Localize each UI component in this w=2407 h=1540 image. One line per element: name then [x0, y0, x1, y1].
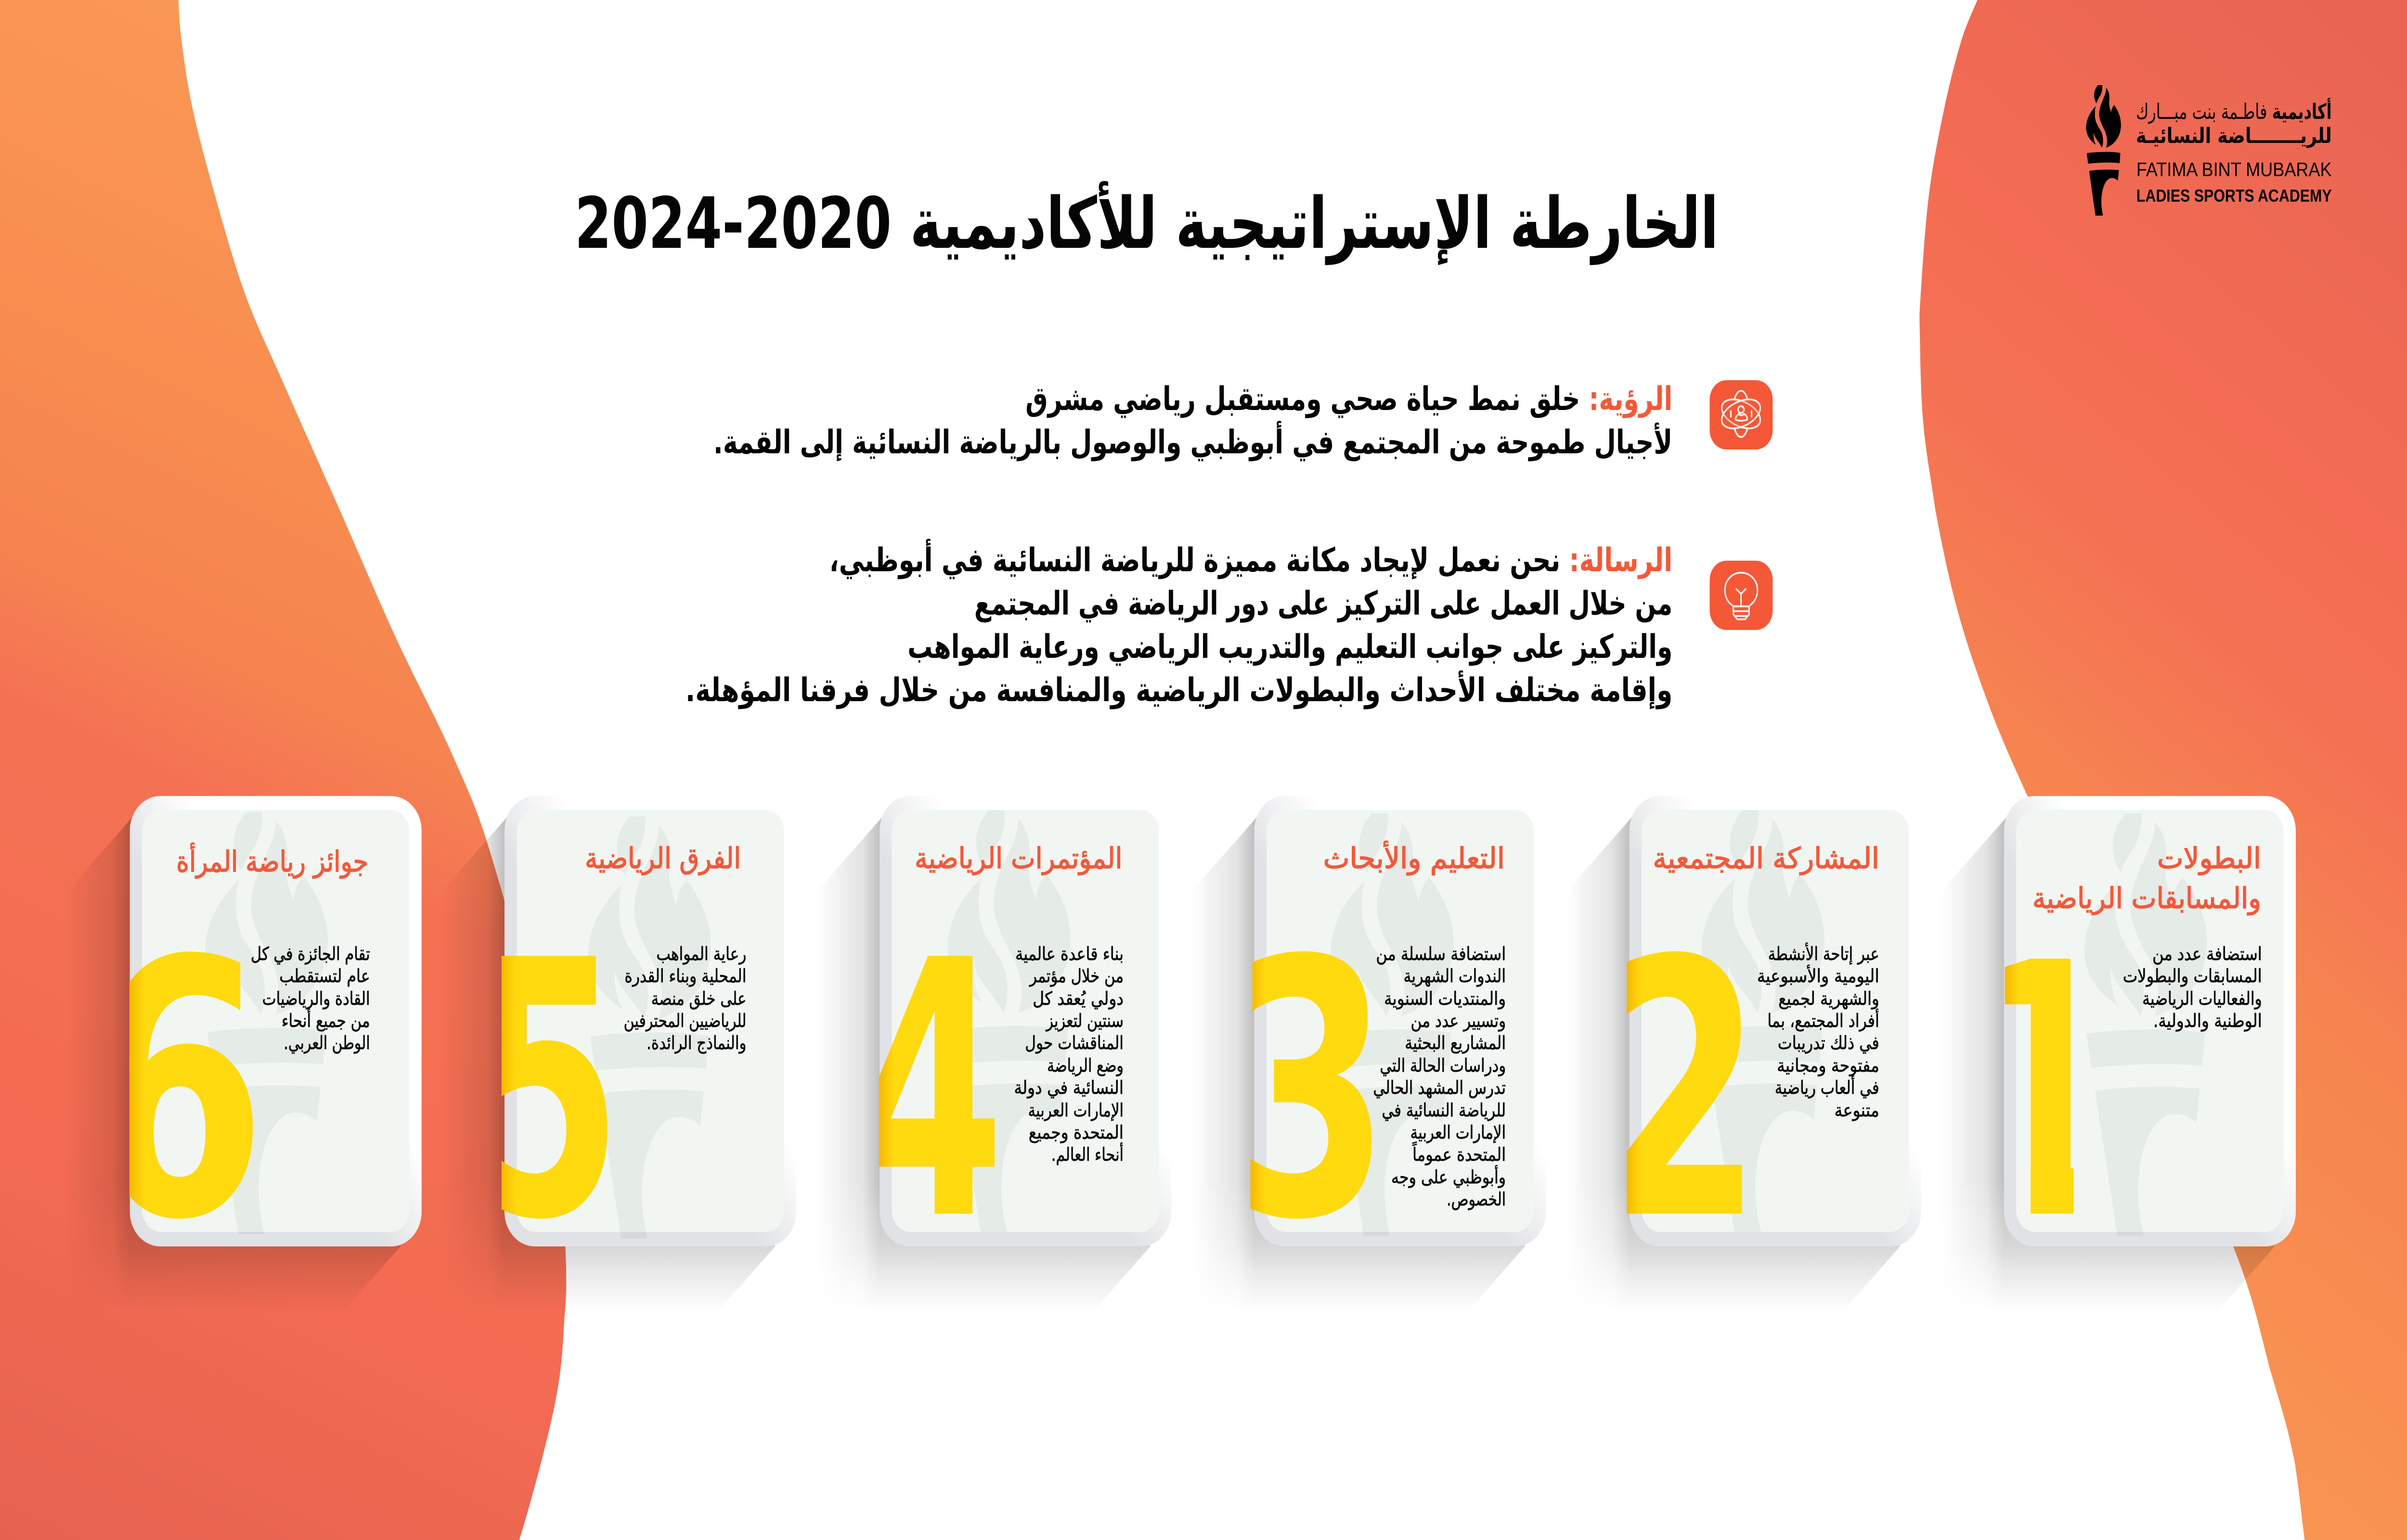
card 3 number: 3	[1229, 886, 1390, 1297]
card 5 body: رعاية المواهب	[656, 944, 746, 965]
card 1 body: استضافة عدد من	[2152, 944, 2262, 965]
card 4 plate	[880, 796, 1171, 1246]
card 4 body: وضع الرياضة	[1047, 1055, 1124, 1077]
mission line 1: الرسالة: نحن نعمل لإيجاد مكانة مميزة للرياضة النسائية في أبوظبي،	[829, 539, 1672, 579]
background shape: left orange wave	[0, 0, 566, 1540]
mission text block	[686, 539, 1672, 709]
card 5 body: على خلق منصة	[651, 988, 746, 1010]
card 5 body: للرياضيين المحترفين	[624, 1011, 746, 1032]
card 4 body: سنتين لتعزيز	[1046, 1011, 1124, 1032]
card 6 body: عام لتستقطب	[279, 966, 370, 987]
card 1: tournaments and competitions	[1941, 796, 2296, 1311]
card 4 body: المناقشات حول	[1025, 1033, 1124, 1054]
card 2 body: متنوعة	[1835, 1100, 1879, 1121]
card 5 body: والنماذج الرائدة.	[647, 1033, 746, 1054]
card 4 body: الإمارات العربية	[1028, 1100, 1124, 1121]
card 6 number: 6	[85, 886, 267, 1297]
vision line 2: لأجيال طموحة من المجتمع في أبوظبي والوصول بالرياضة النسائية إلى القمة.	[713, 421, 1672, 462]
mission line 2: من خلال العمل على التركيز على دور الرياضة في المجتمع	[974, 585, 1672, 623]
card 3 body: والمنتديات السنوية	[1384, 988, 1506, 1010]
card 3 body: للرياضة النسائية في	[1382, 1100, 1506, 1121]
card 1 body: المسابقات والبطولات	[2123, 966, 2262, 987]
card 3 body: المشاريع البحثية	[1405, 1033, 1506, 1054]
card 5 body: المحلية وبناء القدرة	[624, 966, 746, 987]
card 6 body	[251, 944, 370, 1054]
card 1 number: 1	[1967, 889, 2123, 1296]
card 3 watermark torch	[1331, 813, 1453, 1236]
card 1 long shadow	[1941, 815, 2275, 1311]
card 4 long shadow	[816, 815, 1150, 1311]
card 5 heading: الفرق الرياضية	[585, 842, 741, 875]
card 1 body: والفعاليات الرياضية	[2142, 988, 2262, 1010]
card 2 plate	[1630, 796, 1921, 1246]
card 2 body: مفتوحة ومجانية	[1777, 1055, 1879, 1077]
card 2 body: في ذلك تدريبات	[1778, 1033, 1879, 1054]
card 1 heading: والمسابقات الرياضية	[2032, 882, 2261, 915]
logo English name line 1: FATIMA BINT MUBARAK	[2136, 159, 2332, 181]
card 5 body	[624, 944, 746, 1054]
logo	[2086, 85, 2332, 216]
logo Arabic name line 1: أكاديمية فاطـمة بنت مبـــارك	[2136, 98, 2332, 124]
card 3 body: الإمارات العربية	[1411, 1122, 1506, 1143]
card 3 heading: التعليم والأبحاث	[1323, 841, 1505, 875]
card 4 body: دولي يُعقد كل	[1033, 988, 1124, 1010]
card 6 body: من جميع أنحاء	[282, 1009, 370, 1032]
card 3 body: المتحدة عموماً	[1412, 1142, 1506, 1166]
title: الخارطة الإستراتيجية للأكاديمية 2020-2024	[575, 181, 1719, 266]
mission line 3: والتركيز على جوانب التعليم والتدريب الرياضي ورعاية المواهب	[907, 628, 1672, 666]
logo torch icon	[2086, 85, 2121, 216]
card 3 body: وأبوظبي على وجه	[1391, 1165, 1506, 1188]
card 1 heading: البطولات	[2157, 842, 2261, 875]
card 2 watermark torch	[1702, 810, 1825, 1232]
card 1 heading	[2032, 842, 2261, 915]
card 3 long shadow	[1191, 815, 1525, 1311]
card 2 number: 2	[1598, 886, 1762, 1297]
card 4 body: المتحدة وجميع	[1029, 1122, 1124, 1143]
card 3 body: تدرس المشهد الحالي	[1373, 1078, 1506, 1099]
card 3 plate	[1254, 796, 1546, 1246]
card 4 body	[1014, 944, 1124, 1166]
card 5 plate	[505, 796, 796, 1246]
card 6 long shadow	[66, 815, 401, 1311]
card 4 body: النسائية في دولة	[1014, 1078, 1124, 1099]
card 3: education and research	[1191, 796, 1546, 1311]
card 1 plate	[2004, 796, 2296, 1246]
card 3 body: الندوات الشهرية	[1403, 966, 1506, 987]
card 1 body	[2123, 944, 2262, 1032]
card 2 body: عبر إتاحة الأنشطة	[1768, 942, 1879, 965]
card 6 body: تقام الجائزة في كل	[251, 944, 370, 965]
background shape: right coral wave	[1919, 0, 2407, 1540]
card 6 heading: جوائز رياضة المرأة	[176, 842, 368, 879]
card 4: sports conferences	[816, 796, 1171, 1311]
icon: vision atom with person	[1709, 380, 1773, 449]
card 2 body: اليومية والأسبوعية	[1757, 964, 1879, 987]
card 4 watermark torch	[948, 810, 1070, 1232]
card 6 body: الوطن العربي.	[284, 1033, 370, 1054]
card 1 watermark torch	[2084, 813, 2207, 1236]
card 2: community participation	[1566, 796, 1921, 1311]
vision text block	[713, 380, 1672, 462]
card 5 long shadow	[441, 815, 775, 1311]
card 4 body: من خلال مؤتمر	[1029, 966, 1124, 987]
card 6 plate	[130, 796, 422, 1246]
card 3 body: الخصوص.	[1447, 1189, 1506, 1210]
card 6: women's sport award	[66, 796, 422, 1311]
card 5 number: 5	[471, 886, 622, 1297]
card 1 body: الوطنية والدولية.	[2153, 1011, 2262, 1032]
icon: mission light bulb	[1709, 561, 1773, 630]
card 5: sports teams	[441, 796, 796, 1311]
card 5 watermark torch	[588, 816, 711, 1239]
card 2 body: والشهرية لجميع	[1778, 988, 1879, 1010]
card 2 body	[1757, 942, 1879, 1121]
logo English name line 2: LADIES SPORTS ACADEMY	[2136, 186, 2332, 205]
card 6 body: القادة والرياضيات	[262, 988, 370, 1010]
card 3 body: ودراسات الحالة التي	[1380, 1055, 1506, 1077]
vision line 1: الرؤية: خلق نمط حياة صحي ومستقبل رياضي مشرق	[1025, 380, 1672, 418]
card 3 body	[1373, 944, 1506, 1210]
card 2 body: أفراد المجتمع، بما	[1767, 1009, 1879, 1032]
card 2 body: في ألعاب رياضية	[1775, 1076, 1879, 1099]
card 2 long shadow	[1566, 815, 1900, 1311]
card 3 body: استضافة سلسلة من	[1376, 944, 1506, 965]
card 4 body: بناء قاعدة عالمية	[1015, 944, 1124, 965]
card 6 watermark torch	[205, 812, 328, 1234]
card 3 body: وتسيير عدد من	[1411, 1011, 1506, 1032]
mission line 4: وإقامة مختلف الأحداث والبطولات الرياضية والمنافسة من خلال فرقنا المؤهلة.	[686, 670, 1672, 709]
card 2 heading: المشاركة المجتمعية	[1653, 842, 1879, 875]
card 4 heading: المؤتمرات الرياضية	[915, 842, 1122, 875]
card 4 number: 4	[856, 886, 1004, 1297]
logo Arabic name line 2: للريــــــــاضة النسائيـة	[2136, 124, 2332, 149]
card 4 body: أنحاء العالم.	[1051, 1142, 1124, 1166]
